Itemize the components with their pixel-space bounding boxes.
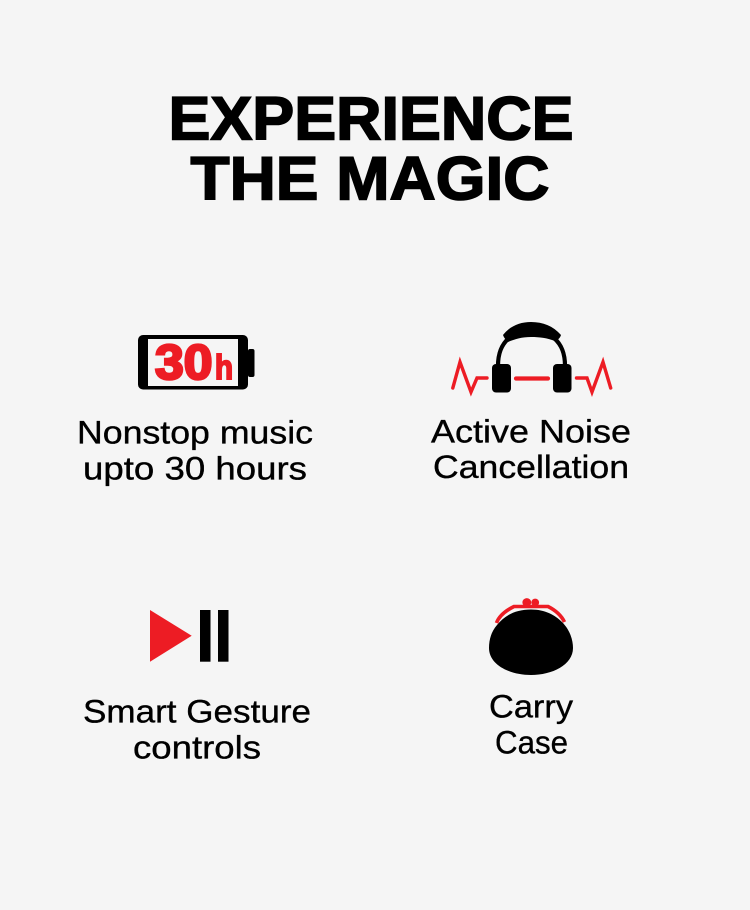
label: noise cancellation: Cancellation <box>433 449 629 485</box>
label: carry case <box>489 688 573 760</box>
label: battery <box>77 414 313 486</box>
title: EXPERIENCE <box>168 84 574 152</box>
panel: noise cancellation <box>431 322 631 485</box>
title <box>168 84 574 212</box>
icon: play pause <box>150 610 228 662</box>
panel: battery life <box>77 335 313 486</box>
label: noise cancellation <box>431 414 631 485</box>
label: battery: upto 30 hours <box>83 450 307 486</box>
title: THE MAGIC <box>190 144 550 212</box>
label: gesture controls: controls <box>133 730 261 766</box>
icon: headphones with sound waves <box>453 322 611 392</box>
label: noise cancellation: Active Noise <box>431 414 631 450</box>
icon: battery 30h: h <box>215 349 233 387</box>
label: gesture controls <box>83 694 311 766</box>
panel: carry case <box>489 598 573 760</box>
icon: battery 30h <box>138 335 254 390</box>
label: battery: Nonstop music <box>77 414 313 450</box>
label: gesture controls: Smart Gesture <box>83 694 311 730</box>
icon: battery 30h: 30 <box>155 336 212 390</box>
label: carry case: Carry <box>489 688 573 724</box>
label: carry case: Case <box>495 724 568 760</box>
panel: gesture controls <box>83 610 311 766</box>
icon: coin purse case <box>489 598 573 675</box>
